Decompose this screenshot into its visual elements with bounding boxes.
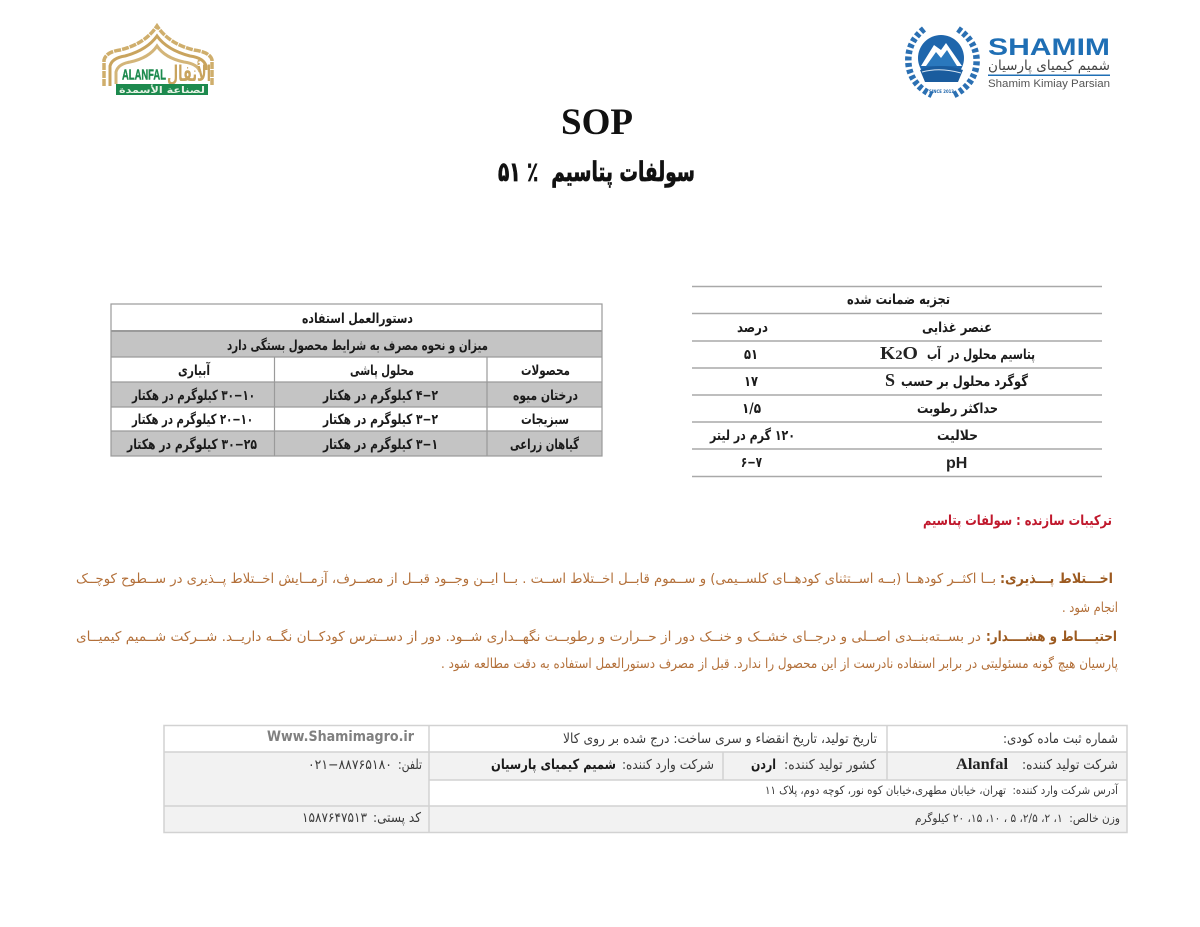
row: pH [741, 455, 967, 472]
postal code [302, 810, 422, 826]
postal code: کد پستی: [373, 810, 422, 826]
logo: Shamim Kimiay Parsian: شمیم کیمیای پارسیان [988, 58, 1110, 74]
manufacturer: Alanfal [956, 756, 1009, 773]
row: fruit trees [131, 387, 578, 404]
postal code: ۱۵۸۷۶۴۷۵۱۳ [302, 810, 367, 826]
row: K2O [744, 343, 1035, 363]
row: field crops: ۳۰−۲۵ کیلوگرم در هکتار [126, 436, 257, 453]
row: pH: ۶−۷ [741, 455, 762, 471]
column headers: محصولات [521, 363, 570, 379]
subtitle: potassium sulfate 51%: سولفات پتاسیم ٪ ۵۱ [498, 157, 695, 188]
row: moisture [742, 401, 998, 417]
row: field crops: گیاهان زراعی [510, 436, 580, 453]
panel: registration information table [164, 725, 1127, 832]
row: vegetables: ۳−۲ کیلوگرم در هکتار [322, 411, 438, 428]
row: fruit trees: ۴−۲ کیلوگرم در هکتار [322, 387, 438, 404]
net weight: وزن خالص: ۱، ۲، ۲/۵، ۵ ، ۱۰، ۱۵، ۲۰ کیلوگرم [915, 811, 1120, 826]
row: pH: pH [946, 455, 967, 472]
row: vegetables: ۲۰−۱۰ کیلوگرم در هکتار [131, 411, 253, 428]
text block: caution: در بســته‌بنــدی اصــلی و درجــای خشــک و خنــک دور از حــرارت و رطوبــت نگهــداری شــود. دور از دســترس کودکــان نگــه داریــد. شــرکت شــمیم کیمیــای [76, 628, 981, 645]
importer [491, 757, 714, 773]
text block: caution: احتیــــاط و هشــــدار: [986, 629, 1117, 645]
column headers: محلول پاشی [350, 363, 414, 379]
text block: caution: پارسیان هیچ گونه مسئولیتی در برابر استفاده نادرست از این محصول را ندارد. قبل از مصرف دستورالعمل استفاده به دقت مطالعه شود . [441, 655, 1118, 672]
logo: Shamim Kimiay Parsian [908, 29, 1110, 95]
manufacturer: شرکت تولید کننده: [1022, 757, 1118, 773]
logo: Shamim Kimiay Parsian: Shamim Kimiay Parsian [988, 78, 1110, 90]
row: K2O: ۵۱ [744, 347, 758, 363]
logo: Shamim Kimiay Parsian: SHAMIM [988, 34, 1110, 61]
manufacturer ingredients line: ترکیبات سازنده : سولفات پتاسیم [923, 513, 1112, 529]
row: field crops [126, 436, 580, 453]
panel: usage instructions table [111, 304, 602, 456]
row: field crops: ۳−۱ کیلوگرم در هکتار [322, 436, 438, 453]
address: آدرس شرکت وارد کننده: تهران، خیابان مطهری،خیابان کوه نور، کوچه دوم، پلاک ۱۱ [765, 783, 1119, 798]
row: fruit trees: درختان میوه [513, 388, 578, 404]
row: S [744, 370, 1029, 390]
text block: compatibility: اخـــتلاط پـــذیری: [1000, 571, 1113, 587]
phone: تلفن: [398, 757, 422, 773]
country of manufacture: کشور تولید کننده: [784, 757, 877, 773]
row: solubility [709, 427, 978, 444]
column headers: درصد [737, 320, 768, 336]
row: vegetables: سبزیجات [521, 412, 569, 428]
row: K2O: K2O [880, 343, 918, 363]
row: S: S [885, 370, 895, 390]
phone: ۰۲۱−۸۸۷۶۵۱۸۰ [308, 757, 392, 773]
website: Www.Shamimagro.ir [267, 729, 414, 745]
logo: Shamim Kimiay Parsian: SINCE 2013 [929, 89, 954, 95]
importer: شرکت وارد کننده: [622, 757, 714, 773]
manufacturer [956, 756, 1118, 773]
importer: شمیم کیمیای پارسیان [491, 757, 616, 773]
row: vegetables [131, 411, 569, 428]
registration number: شماره ثبت ماده کودی: [1003, 731, 1118, 747]
logo: Alanfal: لصناعة الأسمدة [119, 84, 205, 96]
country of manufacture [751, 757, 877, 773]
logo: Alanfal [104, 26, 212, 96]
row: moisture: حداکثر رطوبت [917, 401, 998, 417]
row: solubility: حلالیت [937, 428, 978, 444]
logo: Alanfal: ALANFAL [122, 66, 166, 84]
column headers [737, 320, 992, 336]
logo: Alanfal: الأنفال [167, 59, 211, 87]
column headers: عنصر غذایی [922, 320, 992, 336]
row: fruit trees: ۳۰−۱۰ کیلوگرم در هکتار [131, 387, 255, 404]
title: SOP: SOP [561, 102, 633, 143]
row: S: ۱۷ [744, 374, 758, 390]
country of manufacture: اردن [751, 757, 776, 773]
dates note: تاریخ تولید، تاریخ انقضاء و سری ساخت: درج شده بر روی کالا [563, 731, 877, 747]
text block: compatibility: انجام شود . [1062, 600, 1118, 616]
row: solubility: ۱۲۰ گرم در لیتر [709, 427, 795, 444]
row: moisture: ۱/۵ [742, 401, 761, 417]
row: S: گوگرد محلول بر حسب [901, 373, 1029, 390]
row: K2O: پتاسیم محلول در آب [927, 345, 1035, 363]
column headers: آبیاری [178, 361, 211, 379]
text block: compatibility [76, 570, 1118, 616]
text block: caution [76, 628, 1118, 672]
text block: compatibility: بــا اکثــر کودهــا (بــه اســتثنای کودهــای کلســیمی) و ســموم قابــل اخــتلاط اســت . بــا ایــن وجــود قبــل از مصــرف، آزمــایش اخــتلاط پــذیری در ســطوح کوچــک [76, 570, 996, 587]
column headers [178, 361, 570, 379]
panel: guaranteed analysis table [692, 286, 1102, 476]
table note: میزان و نحوه مصرف به شرایط محصول بستگی دارد [227, 337, 488, 354]
table heading: دستورالعمل استفاده [302, 311, 413, 327]
table heading: تجزیه ضمانت شده [847, 292, 950, 308]
